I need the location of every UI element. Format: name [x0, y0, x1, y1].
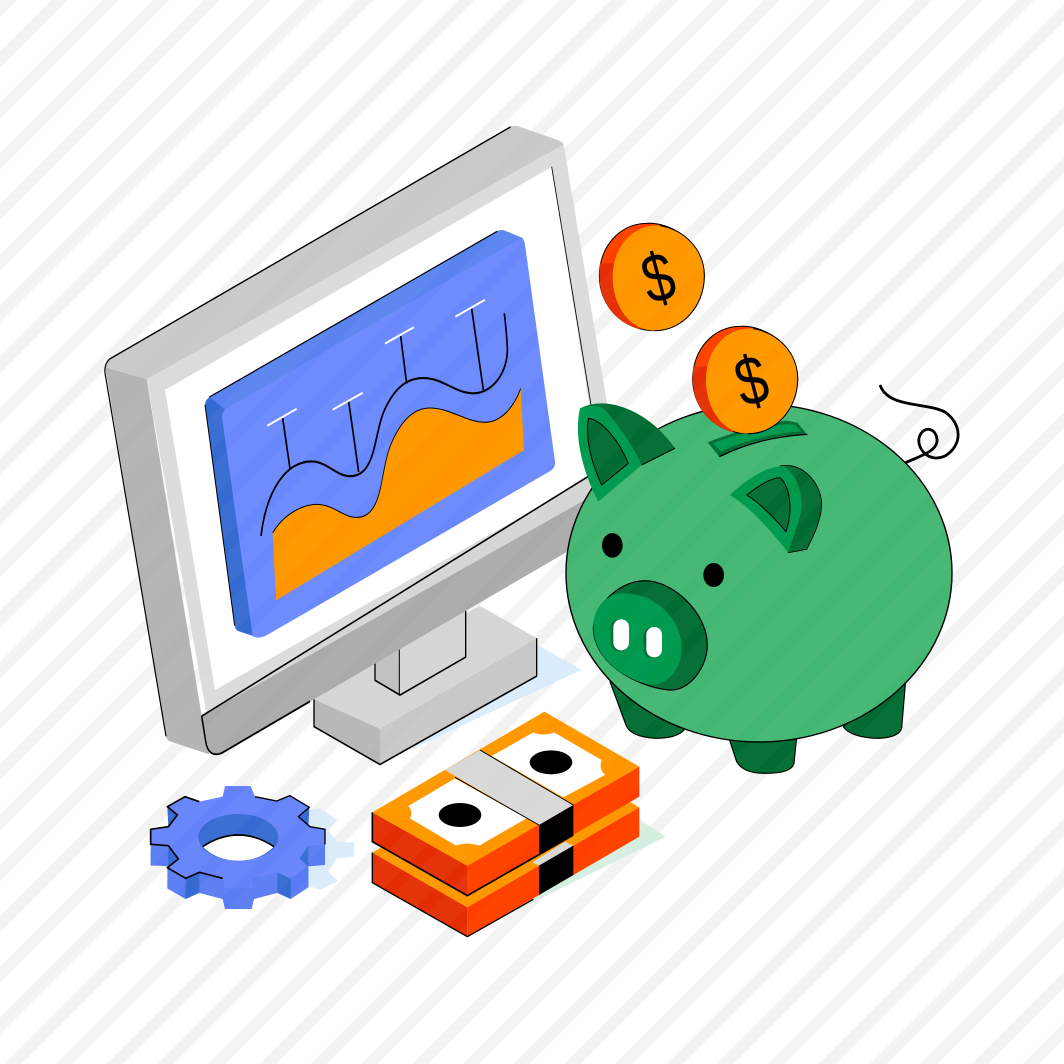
illustration: stacked banknotes: [372, 712, 666, 937]
dollar sign: $: [727, 340, 776, 422]
right banknote: [492, 732, 605, 797]
left banknote: [408, 778, 527, 846]
illustration: piggy bank: [566, 385, 958, 773]
pig nostrils: [611, 619, 662, 658]
pig body: [566, 404, 952, 742]
gear top face: [151, 786, 325, 888]
monitor stand neck: [375, 602, 466, 695]
gear side: [151, 807, 325, 909]
area chart top line: [273, 389, 521, 533]
monitor outlines: [105, 127, 592, 754]
upper bundle: [372, 712, 639, 896]
pig coin slot: [708, 421, 807, 457]
gear side shading: [167, 807, 309, 899]
chart panel: [205, 230, 555, 638]
monitor bottom face: [202, 476, 600, 755]
illustration: monitor: [105, 126, 614, 764]
monitor shadow: [410, 645, 582, 750]
lower bundle: [372, 752, 639, 937]
line chart: [261, 313, 507, 536]
banknote seals: [439, 750, 572, 827]
pig tail: [880, 385, 958, 463]
illustration: gear: [151, 786, 354, 909]
pig snout: [593, 581, 707, 690]
dollar sign: $: [633, 237, 683, 319]
pig legs: [610, 680, 906, 773]
area chart: [273, 389, 524, 600]
banknotes shadow: [503, 820, 666, 917]
gear hole: [198, 814, 278, 861]
chart markers: [283, 309, 483, 472]
monitor top face: [106, 126, 563, 379]
monitor stand base: [314, 606, 537, 764]
monitor left face: [105, 367, 209, 754]
pig eyes: [602, 533, 724, 587]
chart marker caps: [267, 300, 485, 426]
monitor screen: [165, 167, 600, 690]
coin: lower: [693, 326, 798, 434]
coin: upper: [599, 223, 704, 331]
gear shadow: [307, 808, 354, 890]
paper band: [445, 750, 573, 825]
monitor bezel: [147, 143, 614, 733]
pig left ear: [578, 403, 675, 502]
gear top outline: [151, 796, 325, 878]
pig right ear: [730, 465, 822, 553]
